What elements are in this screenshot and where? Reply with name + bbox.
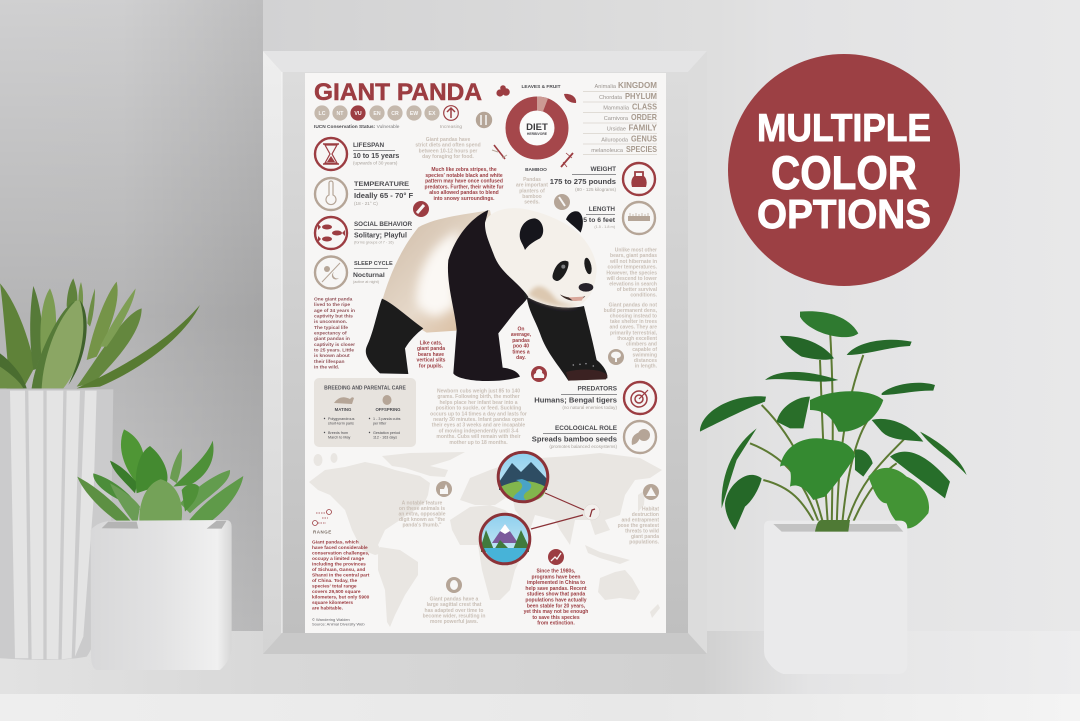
lifespan stat: [315, 138, 399, 170]
icon: seed: [554, 194, 570, 210]
mating facts: Breeds from: [328, 431, 348, 435]
lifespan stat: (upwards of 30 years): [353, 160, 398, 166]
text: lifespan in captivity: One giant panda: [314, 296, 353, 302]
text: black and white pattern: into snowy surroundings.: [433, 196, 495, 202]
text: range description: square kilometers: [312, 600, 353, 606]
text: black and white pattern: pattern may have once confused: [425, 179, 503, 185]
text: sagittal crest: become wider, resulting in: [423, 614, 485, 620]
text: lifespan in captivity: is uncommon.: [314, 319, 348, 325]
far eye patch: [583, 257, 593, 275]
icon: fish school: [315, 217, 347, 249]
text: range description: conservation challenges,: [312, 550, 370, 556]
text: seed planters: are important: [516, 183, 548, 189]
taxonomy table: Animalia: [595, 84, 617, 90]
text: threats: Habitat: [642, 506, 659, 512]
text: range description: are habitable.: [312, 606, 343, 612]
text: dens and climbing: choosing instead to: [610, 314, 657, 320]
label: leaves and fruit: LEAVES & FRUIT: [521, 84, 561, 90]
panel: breeding and parental care: MATING: [335, 407, 352, 412]
temperature stat: [315, 178, 414, 210]
text: newborn cubs: grams. Following birth, the mother: [437, 394, 520, 400]
text: diet and foraging: strict diets and often spend: [415, 143, 481, 149]
icon: target: [624, 382, 656, 414]
panel: breeding and parental care: [314, 378, 416, 447]
sleep cycle stat: (active at night): [353, 280, 380, 284]
pot rim shadow: [773, 524, 903, 532]
text: newborn cubs: months. Cubs will remain with their: [436, 434, 521, 440]
text: conservation programs: implemented in China to: [527, 580, 585, 586]
icon: skull: [446, 577, 462, 593]
taxonomy table: ORDER: [631, 112, 657, 122]
mating facts: [324, 417, 355, 440]
text: conservation programs: programs have been: [532, 574, 580, 580]
text: conservation programs: populations have actually: [525, 598, 587, 604]
text: lifespan in captivity: is known about: [314, 353, 350, 359]
text: range description: occupy a limited range: [312, 556, 364, 562]
conservation status scale: [314, 105, 462, 130]
text: black and white pattern: also allowed pandas to blend: [429, 190, 499, 196]
temperature stat: (18 - 21° C): [354, 201, 378, 206]
range label: RANGE: [313, 530, 332, 534]
text: dens and climbing: take shelter in trees: [610, 319, 657, 325]
length stat: (1.5 - 1.8 m): [594, 225, 616, 229]
title: GIANT PANDA: [314, 79, 482, 106]
social behavior stat: SOCIAL BEHAVIOR: [354, 221, 412, 228]
text: vertical pupils: vertical slits: [417, 358, 446, 364]
ecological role stat: ECOLOGICAL ROLE: [555, 425, 618, 432]
icon: warning: [643, 484, 659, 500]
torso band and front leg: [448, 210, 528, 381]
icon: tree: [608, 349, 624, 365]
rear body: [382, 210, 500, 333]
text: panda thumb: an extra, opposable: [399, 512, 446, 518]
far front leg: [527, 297, 607, 381]
badge: multiple color options: OPTIONS: [757, 191, 931, 237]
weight stat: (80 - 125 kilograms): [575, 187, 616, 192]
text: vertical pupils: for pupils.: [419, 363, 444, 369]
badge: multiple color options: [728, 54, 960, 286]
text: vertical pupils: Like cats,: [420, 340, 443, 346]
offspring facts: Gestation period: [373, 431, 400, 435]
text: threats: giant panda: [631, 534, 659, 540]
text: threats: destruction: [632, 512, 659, 518]
eye patch: [552, 261, 569, 281]
text: seed planters: bamboo: [522, 194, 542, 200]
text: dens and climbing: distances: [634, 358, 657, 364]
text: dens and climbing: build permanent dens,: [604, 308, 658, 314]
text: lifespan in captivity: to 25 years. Little: [314, 348, 354, 354]
panel: breeding and parental care: BREEDING AND PARENTAL CARE: [324, 386, 407, 392]
icon: thermometer: [315, 178, 347, 210]
icon: panda silhouettes: [314, 453, 338, 466]
text: lifespan in captivity: lived to the ripe: [314, 302, 350, 308]
text: poo fact: On: [518, 326, 524, 332]
text: poo fact: poo 40: [513, 344, 529, 350]
taxonomy table: [583, 80, 657, 154]
text: black and white pattern: Much like zebra stripes, the: [431, 167, 497, 173]
weight stat: WEIGHT: [590, 166, 616, 173]
text: conservation programs: yet this may not be enough: [524, 609, 588, 615]
icon: thumb: [436, 481, 452, 497]
text: range description: have faced considerable: [312, 545, 368, 551]
text: range description: kilometers, but only 5900: [312, 594, 370, 600]
temperature stat: Ideally 65 - 70° F: [354, 191, 414, 200]
tall fluted vase with agave plant: [0, 278, 200, 660]
credits: Source: Animal Diversity Web: [312, 622, 365, 626]
icon: fork and knife: [476, 112, 492, 128]
text: poo fact: pandas: [512, 338, 530, 344]
social behavior stat: [315, 217, 412, 249]
ecological role stat: (promotes balanced ecosystems): [549, 444, 617, 449]
length stat: 5 to 6 feet: [583, 217, 616, 224]
square pot with succulent: [77, 429, 243, 670]
taxonomy table: melanoleuca: [591, 148, 624, 154]
ecological role stat: Spreads bamboo seeds: [532, 434, 617, 444]
taxonomy table: GENUS: [631, 134, 657, 144]
text: dens and climbing: though excellent: [617, 336, 657, 342]
offspring facts: 112 - 163 days: [373, 436, 397, 440]
status badges: CR: [391, 111, 399, 117]
neck shading: [528, 286, 578, 307]
weight stat: [550, 163, 655, 195]
landscape medallion: mountain lake: [480, 514, 530, 564]
square pot with monstera: [700, 311, 967, 674]
status caption: IUCN Conservation Status: Vulnerable: [314, 124, 400, 130]
text: sagittal crest: has adapted over time to: [425, 608, 483, 614]
mouth: [560, 294, 585, 301]
sleep cycle stat: Nocturnal: [353, 272, 385, 279]
text: poo fact: average,: [511, 332, 532, 338]
text: panda thumb: on these animals is: [399, 506, 445, 512]
status badges: EN: [373, 111, 381, 117]
text: newborn cubs: of moving independently until 3-4: [439, 428, 519, 434]
offspring facts: 1 - 3 panda cubs: [373, 417, 401, 421]
range marker: china: [584, 504, 600, 520]
icon: leaf and gear: [624, 421, 656, 453]
monstera leaves: [700, 311, 967, 530]
taxonomy table: SPECIES: [626, 144, 657, 154]
social behavior stat: (forms groups of 7 - 16): [354, 240, 394, 244]
recess behind the poster: [282, 72, 688, 633]
text: range description: including the provinces: [312, 562, 366, 568]
text: hibernation: cooler temperatures.: [608, 265, 658, 271]
toes: [572, 363, 594, 367]
text: sagittal crest: large sagittal crest that: [427, 602, 482, 608]
text: hibernation: bears, giant pandas: [610, 253, 657, 259]
left ear: [520, 218, 543, 250]
taxonomy table: Carnivora: [604, 116, 629, 122]
text: lifespan in captivity: captivity but this: [314, 314, 353, 320]
predators stat: (no natural enemies today): [562, 405, 617, 410]
white belly highlight: [417, 230, 460, 317]
text: dens and climbing: capable of: [632, 347, 657, 353]
icon: brush: [413, 201, 429, 217]
status badges: EX: [429, 111, 436, 117]
text: conservation programs: Since the 1980s,: [537, 568, 576, 574]
diet donut chart: [512, 96, 562, 152]
text: lifespan in captivity: expectancy of: [314, 330, 347, 336]
text: lifespan in captivity: in the wild.: [314, 364, 340, 370]
text: threats: pose the greatest: [618, 523, 659, 529]
text: sagittal crest: Giant pandas have a: [430, 596, 479, 602]
offspring facts: per litter: [373, 422, 387, 426]
text: newborn cubs: helps place her infant bear into a: [439, 400, 518, 406]
icon: hourglass: [315, 138, 347, 170]
badge: multiple color options: COLOR: [771, 146, 917, 199]
text: lifespan in captivity: The typical life: [314, 325, 348, 331]
text: threats: threats to wild: [625, 528, 659, 534]
taxonomy table: Chordata: [599, 95, 623, 101]
mating facts: Polygynandrous: [328, 417, 355, 421]
text: range description: of Sichuan, Gansu, and: [312, 567, 365, 573]
status badges: EW: [410, 111, 418, 117]
text: newborn cubs: nearly 30 minutes. Infant pandas open: [433, 417, 524, 423]
text: seed planters: seeds.: [524, 200, 540, 206]
sleep cycle stat: [315, 256, 393, 288]
taxonomy table: Mammalia: [603, 106, 630, 112]
rear leg: [366, 299, 423, 374]
icon: sun and moon: [315, 256, 347, 288]
icon: mating pandas: [334, 397, 354, 404]
text: hibernation: will descend to lower: [606, 276, 657, 282]
taxonomy table: PHYLUM: [625, 91, 657, 101]
status badges: LC: [319, 111, 326, 117]
text: dens and climbing: primarily terrestrial,: [610, 330, 658, 336]
taxonomy table: FAMILY: [628, 122, 657, 132]
status badges: NT: [337, 111, 344, 117]
text: dens and climbing: swimming: [633, 352, 657, 358]
icon: growth arrow: [548, 549, 564, 565]
mating facts: March to May: [328, 436, 350, 440]
text: diet and foraging: Giant pandas have: [426, 137, 470, 143]
text: conservation programs: been stable for 20 years,: [527, 603, 586, 609]
text: hibernation: conditions.: [630, 292, 658, 298]
text: dens and climbing: and caves. They are: [609, 325, 657, 331]
length stat: LENGTH: [589, 206, 615, 213]
text: lifespan in captivity: their lifespan: [314, 359, 344, 365]
text: dens and climbing: climbers and: [626, 341, 657, 347]
text: conservation programs: studies show that panda: [527, 592, 585, 598]
predators stat: [534, 382, 656, 414]
icon: poo: [531, 366, 547, 382]
agave leaves: [0, 278, 200, 388]
text: threats: and entrapment: [621, 518, 659, 524]
status badges: VU: [354, 111, 362, 117]
text: newborn cubs: position to suckle, or feed. Suckling: [436, 406, 521, 412]
icon: bamboo left: [492, 145, 507, 159]
world map: [309, 452, 662, 627]
icon: range route: [312, 510, 332, 526]
text: panda thumb: panda's thumb.": [402, 522, 442, 528]
text: vertical pupils: giant panda: [417, 346, 445, 352]
credits: © Wandering Walden: [312, 617, 350, 622]
text: lifespan in captivity: age of 34 years in: [314, 308, 355, 314]
text: panda thumb: digit known as "the: [399, 517, 445, 523]
text: range description: species' total range: [312, 584, 357, 590]
text: poo fact: day.: [516, 355, 526, 361]
text: sagittal crest: more powerful jaws.: [430, 619, 479, 625]
length stat: [583, 202, 655, 234]
status badges: [314, 105, 440, 121]
badge: multiple color options: MULTIPLE: [757, 107, 931, 150]
text: seed planters: Pandas: [523, 177, 541, 183]
text: seed planters: planters of: [519, 188, 545, 194]
text: newborn cubs: Newborn cubs weigh just 85 to 140: [437, 388, 520, 394]
text: lifespan in captivity: captivity is closer: [314, 342, 355, 348]
icon: offspring: [382, 395, 392, 405]
text: hibernation: of better survival: [617, 287, 658, 293]
trend caption: Increasing: [440, 124, 462, 130]
succulent leaves: [77, 429, 243, 528]
icon: kettlebell: [623, 163, 655, 195]
icon: bamboo right: [561, 153, 573, 167]
panda: [366, 208, 607, 381]
icon: leaf: [564, 94, 576, 103]
text: diet and foraging: between 10-12 hours per: [419, 148, 477, 154]
text: hibernation: Unlike most other: [615, 248, 657, 254]
text: dens and climbing: Giant pandas do not: [609, 302, 657, 308]
lifespan stat: LIFESPAN: [353, 142, 385, 149]
offspring facts: [369, 417, 401, 440]
sleep cycle stat: SLEEP CYCLE: [354, 261, 393, 267]
shelf: [0, 631, 1080, 721]
nose: [579, 283, 593, 292]
text: panda thumb: A notable feature: [402, 500, 443, 506]
mating facts: short-term pairs: [328, 422, 354, 426]
stems: [750, 330, 907, 530]
text: conservation programs: from extinction.: [537, 621, 575, 627]
text: dens and climbing: in length.: [635, 364, 658, 370]
icon: ruler: [623, 202, 655, 234]
predators stat: PREDATORS: [577, 386, 618, 392]
head: [485, 208, 597, 307]
text: newborn cubs: their eyes at 3 weeks and are incapable: [432, 423, 525, 429]
right ear: [566, 211, 583, 233]
diet donut chart: HERBIVORE: [527, 132, 548, 136]
predators stat: Humans; Bengal tigers: [534, 396, 617, 404]
text: range description: of China. Today, the: [312, 578, 357, 584]
text: hibernation: However, the species: [606, 270, 657, 276]
taxonomy table: Ailuropoda: [601, 138, 629, 144]
text: hibernation: will not hibernate in: [609, 259, 657, 265]
taxonomy table: Ursidae: [607, 126, 626, 132]
pot body: [764, 521, 907, 674]
text: diet and foraging: day foraging for food.: [422, 154, 474, 160]
text: range description: Shanxi in the central part: [312, 572, 370, 578]
connector lines to range marker: [531, 493, 584, 529]
text: black and white pattern: predators. Further, their white fur: [425, 184, 504, 190]
landscape medallion: river valley: [498, 452, 548, 502]
text: conservation programs: help save pandas. Recent: [525, 586, 587, 592]
taxonomy table: KINGDOM: [618, 80, 657, 90]
text: hibernation: elevations in search: [609, 281, 657, 287]
poster: [305, 73, 666, 633]
weight stat: 175 to 275 pounds: [550, 177, 616, 186]
social behavior stat: Solitary; Playful: [354, 232, 407, 240]
text: conservation programs: to save this species: [532, 615, 580, 621]
temperature stat: TEMPERATURE: [354, 181, 410, 188]
paw: [566, 370, 607, 381]
text: range description: covers 29,500 square: [312, 589, 361, 595]
icon: increasing arrow: [444, 106, 458, 120]
label: bamboo: BAMBOO: [525, 167, 547, 173]
ecological role stat: [532, 421, 656, 453]
panel: breeding and parental care: OFFSPRING: [375, 407, 401, 412]
text: vertical pupils: bears have: [418, 352, 444, 358]
taxonomy table: CLASS: [632, 102, 657, 112]
text: threats: populations.: [629, 540, 660, 546]
text: newborn cubs: mother up to 18 months.: [449, 440, 508, 446]
text: lifespan in captivity: giant pandas in: [314, 336, 350, 342]
icon: fruit: [496, 85, 510, 97]
text: range description: Giant pandas, which: [312, 540, 359, 546]
diet donut chart: DIET: [526, 122, 548, 133]
text: newborn cubs: occurs up to 14 times a day and lasts for: [430, 411, 527, 417]
white picture frame: [263, 51, 707, 654]
text: black and white pattern: species' notable black and white: [425, 173, 503, 179]
lifespan stat: 10 to 15 years: [353, 153, 399, 160]
text: poo fact: times a: [512, 349, 530, 355]
